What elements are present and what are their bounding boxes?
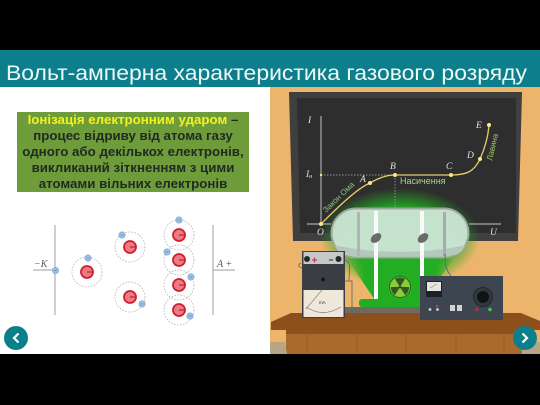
current-voltage graph: I — [307, 116, 312, 126]
anode — [213, 225, 235, 315]
white content area — [0, 87, 270, 354]
definition text box: одного або декількох електронів, — [22, 144, 244, 159]
current-voltage graph: н — [309, 174, 312, 180]
current-voltage graph: U — [490, 228, 498, 238]
current-voltage graph: B — [390, 162, 396, 172]
current-voltage graph: C — [446, 162, 453, 172]
current-voltage graph: A — [359, 175, 366, 185]
source bar — [359, 299, 424, 307]
top black band — [0, 0, 540, 50]
atoms diagram — [33, 217, 235, 325]
cathode label: −K — [34, 259, 49, 270]
cathode — [33, 225, 55, 315]
green light column — [345, 256, 455, 300]
current-voltage graph — [305, 116, 501, 238]
milliammeter: mA — [319, 300, 326, 305]
back button — [4, 326, 28, 350]
definition text box: Іонізація електронним ударом – — [28, 112, 238, 127]
current-voltage graph: Закон Ома — [321, 180, 357, 214]
next button — [513, 326, 537, 350]
green glow — [320, 188, 480, 288]
current-voltage graph: I — [306, 170, 309, 180]
title banner: Вольт-амперна характеристика газового розряду — [6, 62, 528, 85]
definition text box: атомами вільних електронів — [39, 176, 227, 191]
definition text box: процес відриву від атома газу — [33, 128, 233, 143]
definition text box: викликаний зіткненням з цими — [32, 160, 234, 175]
desk — [270, 313, 540, 354]
illustration: gas discharge apparatus — [270, 87, 540, 354]
current-voltage graph: O — [317, 228, 324, 238]
current-voltage graph: Лавина — [485, 132, 500, 161]
current-voltage graph: D — [466, 151, 474, 161]
radiation source — [390, 276, 410, 298]
milliammeter — [299, 251, 352, 318]
current-voltage graph: E — [475, 121, 482, 131]
definition text box — [17, 112, 249, 192]
stand — [345, 307, 425, 318]
chalkboard — [289, 92, 522, 241]
current-voltage graph: Насичення — [400, 176, 446, 186]
gas tube — [332, 208, 468, 299]
anode label: A + — [216, 259, 232, 270]
power supply — [420, 254, 503, 320]
title banner — [0, 50, 540, 87]
